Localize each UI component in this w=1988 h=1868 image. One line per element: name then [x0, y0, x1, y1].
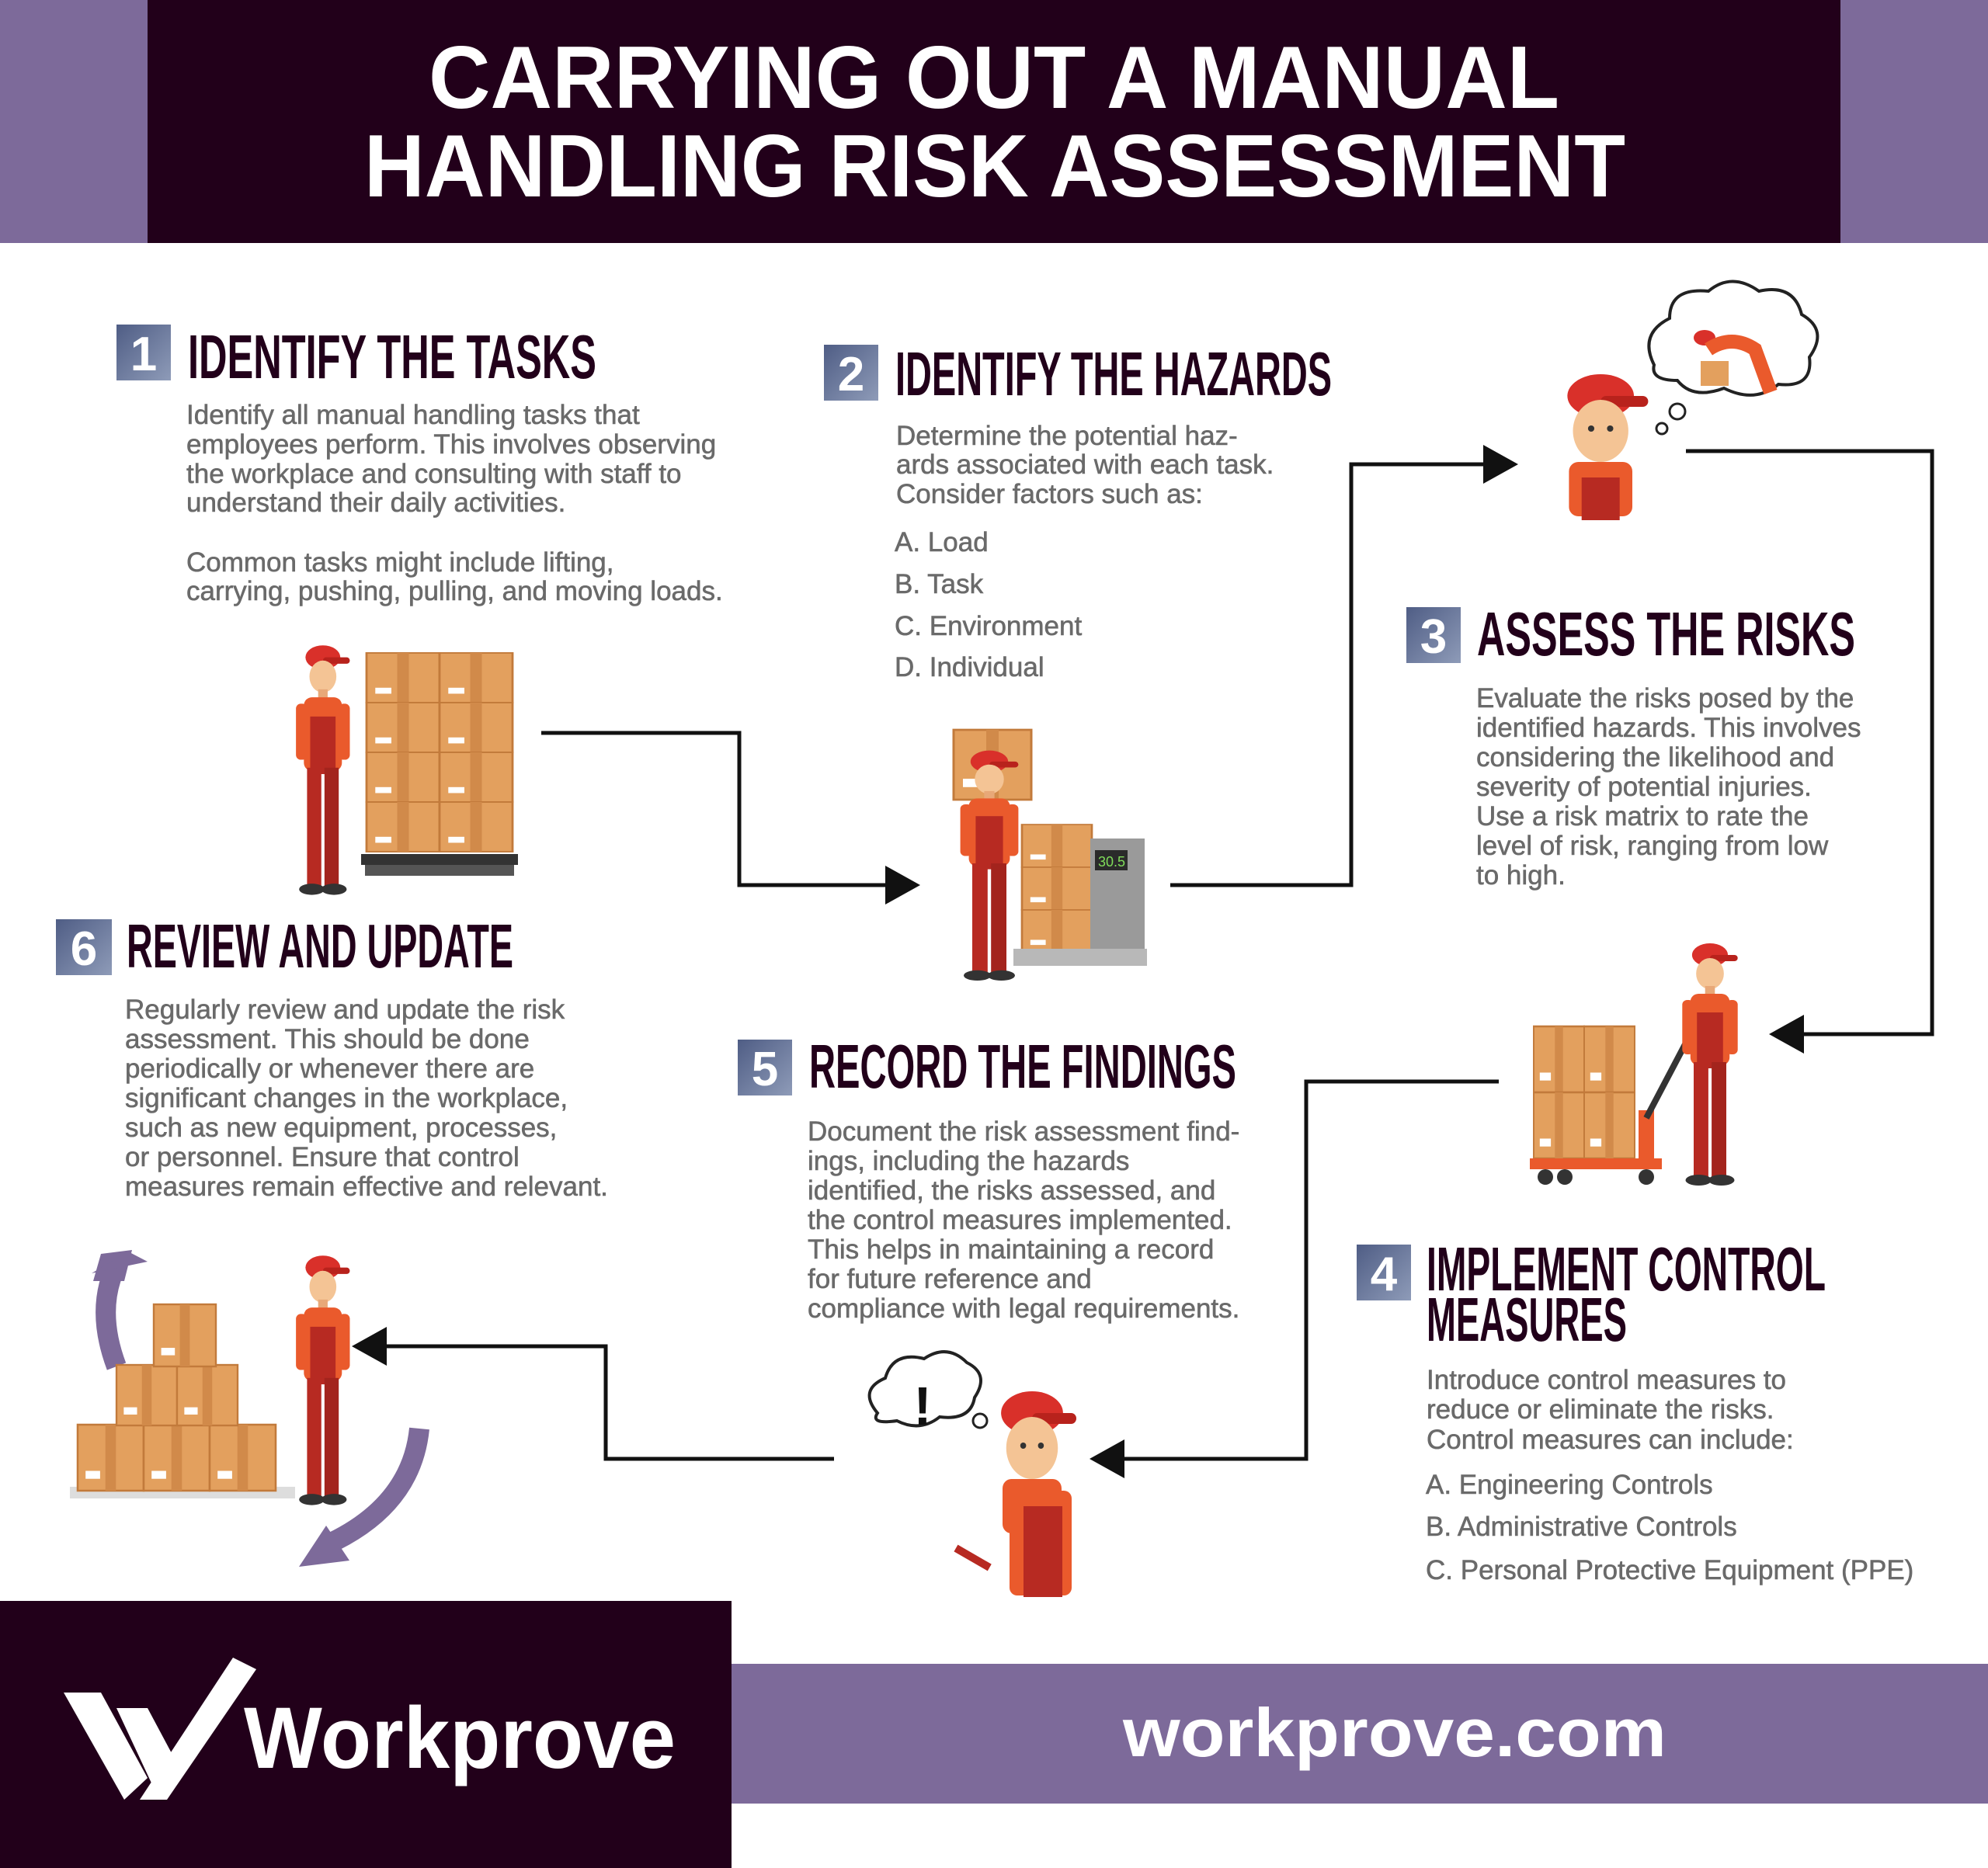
illustration: worker with exclamation [870, 1352, 1076, 1597]
illustration: worker with scale [954, 730, 1147, 981]
header band [0, 0, 1988, 243]
heading 4: MEASURES [1427, 1285, 1627, 1354]
text 5: the control measures implemented. [808, 1205, 1232, 1235]
text 4: Introduce control measures to [1427, 1365, 1786, 1395]
text 2: B. Task [895, 569, 984, 599]
text 6: or personnel. Ensure that control [125, 1142, 520, 1172]
text 5: ings, including the hazards [808, 1146, 1129, 1176]
text 6: significant changes in the workplace, [125, 1083, 568, 1113]
heading 6: REVIEW AND UPDATE [127, 911, 513, 981]
text 2: D. Individual [895, 652, 1044, 682]
text 4: B. Administrative Controls [1426, 1512, 1737, 1542]
badge 4: 4 [1371, 1248, 1398, 1301]
text 5: This helps in maintaining a record [808, 1234, 1214, 1265]
text 5: identified, the risks assessed, and [808, 1175, 1215, 1206]
panel: step 6 [56, 911, 608, 1202]
heading 2: IDENTIFY THE HAZARDS [895, 339, 1332, 408]
text 2: A. Load [895, 527, 989, 557]
panel: step 3 [1406, 599, 1861, 891]
title: HANDLING RISK ASSESSMENT [364, 117, 1625, 216]
badge 5 [738, 1040, 792, 1096]
panel: step 1 [116, 322, 723, 606]
text 4: Control measures can include: [1427, 1425, 1794, 1455]
badge 6: 6 [71, 922, 97, 976]
logo [64, 1658, 676, 1800]
badge 4 [1357, 1245, 1411, 1301]
text 2: Consider factors such as: [896, 479, 1203, 509]
text 2: ards associated with each task. [896, 450, 1274, 480]
heading 5: RECORD THE FINDINGS [809, 1032, 1236, 1101]
heading 1: IDENTIFY THE TASKS [188, 322, 596, 391]
illustration: worker with exclamation: ! [913, 1376, 932, 1436]
logo: Workprove [244, 1689, 676, 1786]
title: CARRYING OUT A MANUAL [429, 29, 1559, 127]
text 2: C. Environment [895, 611, 1082, 641]
text 4: C. Personal Protective Equipment (PPE) [1426, 1555, 1913, 1585]
text 3: considering the likelihood and [1476, 742, 1834, 773]
text 1: Common tasks might include lifting, [186, 547, 613, 578]
illustration: worker thinking [1567, 281, 1817, 520]
badge 2 [824, 345, 878, 401]
badge 6 [56, 919, 112, 976]
badge 1 [116, 325, 171, 381]
text 5: Document the risk assessment find- [808, 1116, 1239, 1147]
text 6: measures remain effective and relevant. [125, 1172, 608, 1202]
text 3: identified hazards. This involves [1476, 713, 1861, 743]
badge 2: 2 [838, 348, 864, 401]
text 4: reduce or eliminate the risks. [1427, 1394, 1774, 1425]
arrowheads [352, 445, 1804, 1478]
illustration: pallet truck [1530, 943, 1738, 1186]
text 6: assessment. This should be done [125, 1024, 530, 1054]
illustration: worker with scale: 30.5 [1098, 854, 1125, 870]
badge 1: 1 [130, 328, 157, 381]
text 6: such as new equipment, processes, [125, 1113, 557, 1143]
text 5: compliance with legal requirements. [808, 1293, 1239, 1324]
text 3: level of risk, ranging from low [1476, 831, 1829, 861]
panel: step 5 [738, 1032, 1239, 1324]
text 3: Evaluate the risks posed by the [1476, 683, 1854, 714]
text 5: for future reference and [808, 1264, 1092, 1294]
text 1: carrying, pushing, pulling, and moving loads. [186, 576, 723, 606]
panel: step 4 [1357, 1234, 1913, 1585]
text 3: Use a risk matrix to rate the [1476, 801, 1809, 832]
text 3: severity of potential injuries. [1476, 772, 1812, 802]
text 1: the workplace and consulting with staff to [186, 459, 682, 489]
arrows: process flow [383, 451, 1932, 1459]
illustration: worker with pallet [296, 645, 518, 895]
text 1: employees perform. This involves observing [186, 429, 716, 460]
text 6: periodically or whenever there are [125, 1054, 534, 1084]
text 4: A. Engineering Controls [1426, 1470, 1713, 1500]
text 2: Determine the potential haz- [896, 421, 1238, 451]
badge 5: 5 [752, 1043, 778, 1096]
url: workprove.com [1122, 1694, 1667, 1771]
title [364, 29, 1625, 216]
badge 3 [1406, 607, 1461, 664]
panel: step 2 [824, 339, 1332, 682]
text 6: Regularly review and update the risk [125, 995, 565, 1025]
text 3: to high. [1476, 860, 1566, 891]
illustration: boxes with cycle arrows [70, 1250, 419, 1567]
text 1: understand their daily activities. [186, 488, 565, 518]
footer [0, 1601, 1988, 1868]
text 1: Identify all manual handling tasks that [186, 400, 640, 430]
badge 3: 3 [1420, 610, 1447, 664]
